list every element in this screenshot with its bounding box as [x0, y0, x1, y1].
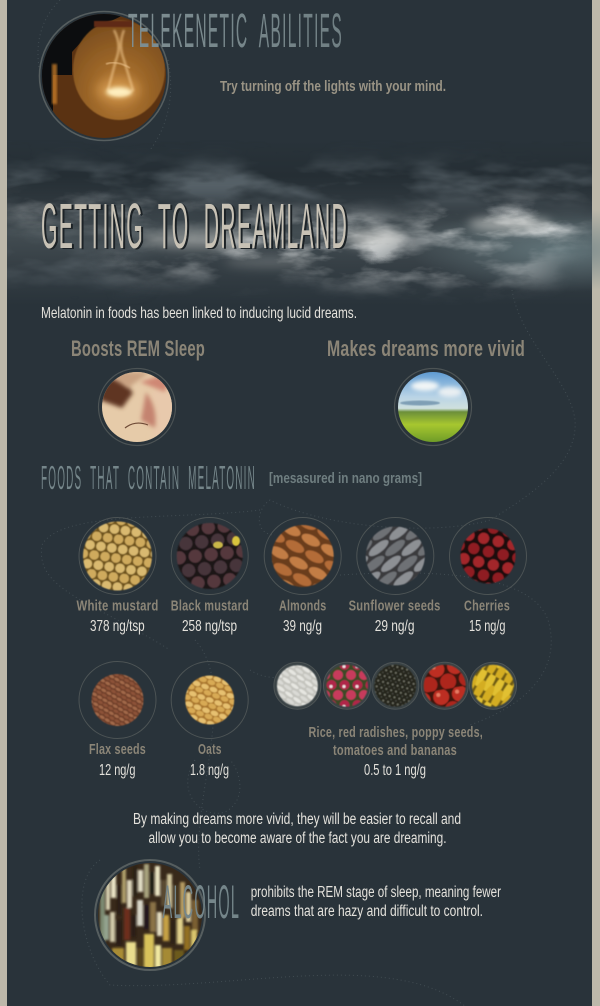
food: oats	[171, 662, 248, 779]
icon: light bulb photo	[40, 12, 170, 142]
food: cherries: Cherries	[464, 598, 510, 614]
food: oats: 1.8 ng/g	[190, 762, 229, 779]
food: black mustard	[171, 518, 249, 635]
banner: night clouds	[7, 159, 600, 296]
benefit: more vivid dreams	[327, 336, 525, 446]
text: turning off lights: Try turning off the lights with your mind.	[220, 78, 446, 95]
text: recall explanation	[133, 811, 461, 847]
text: melatonin intro: Melatonin in foods has been linked to inducing lucid dreams.	[41, 305, 357, 322]
text: ALCOHOL	[163, 875, 240, 928]
food: white mustard: 378 ng/tsp	[90, 618, 145, 635]
food: cherries	[450, 518, 526, 635]
food group: rice, radishes, poppy seeds, tomatoes, bananas	[274, 662, 516, 779]
food: almonds: Almonds	[279, 598, 326, 614]
icon: red radishes	[324, 662, 370, 709]
icon: green field photo	[394, 368, 472, 446]
food: sunflower seeds: 29 ng/g	[375, 618, 414, 635]
text: recall explanation: allow you to become aware of the fact you are dreaming.	[148, 830, 446, 847]
food: flax seeds	[79, 662, 156, 779]
benefit: boosts REM sleep	[71, 336, 205, 446]
text: alcohol effect: prohibits the REM stage of sleep, meaning fewer	[251, 884, 501, 901]
food: almonds	[264, 518, 341, 635]
heading: makes dreams more vivid: Makes dreams more vivid	[327, 336, 525, 361]
icon: poppy seeds	[372, 662, 419, 709]
icon: alcohol bottles photo	[95, 860, 205, 970]
icon: sleeping ear photo	[98, 368, 176, 446]
label: food group names	[308, 725, 483, 759]
food: cherries: 15 ng/g	[469, 618, 506, 635]
text: alcohol effect	[251, 884, 501, 920]
icon: tomatoes	[421, 662, 468, 709]
food: sunflower seeds: Sunflower seeds	[349, 598, 441, 614]
heading: getting to dreamland	[41, 190, 350, 263]
label: food group names: tomatoes and bananas	[333, 743, 457, 759]
food: white mustard: White mustard	[76, 598, 158, 614]
label: food group names: Rice, red radishes, poppy seeds,	[308, 725, 483, 741]
food: oats: Oats	[198, 742, 222, 758]
food: flax seeds: Flax seeds	[89, 742, 146, 758]
heading: boosts REM sleep: Boosts REM Sleep	[71, 336, 205, 361]
icon: rice	[274, 662, 321, 709]
food: sunflower seeds	[349, 518, 441, 635]
food: black mustard: Black mustard	[171, 598, 249, 614]
text: alcohol effect: dreams that are hazy and difficult to control.	[251, 903, 483, 920]
food: white mustard	[76, 518, 158, 635]
text: recall explanation: By making dreams more vivid, they will be easier to recall and	[133, 811, 461, 828]
food: almonds: 39 ng/g	[283, 618, 322, 635]
food: black mustard: 258 ng/tsp	[182, 618, 237, 635]
value: food group amount: 0.5 to 1 ng/g	[364, 762, 426, 779]
food: flax seeds: 12 ng/g	[99, 762, 136, 779]
note: measured in nano grams: [mesasured in nano grams]	[269, 470, 422, 487]
icon: bananas	[470, 662, 516, 709]
